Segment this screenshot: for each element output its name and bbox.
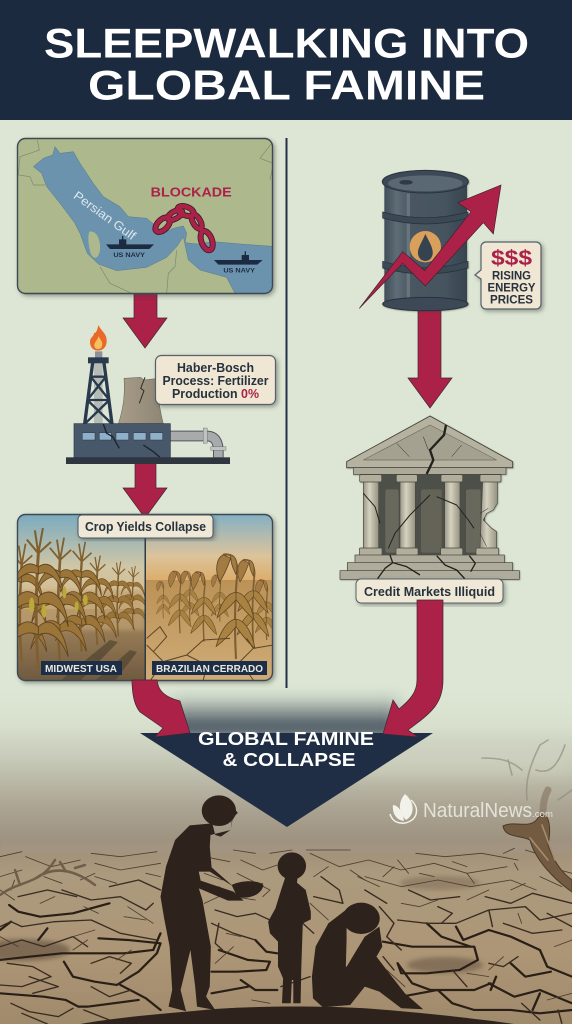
panel: crop yields xyxy=(0,514,278,681)
pediment xyxy=(347,416,513,468)
callout: Haber-Bosch: Production 0% xyxy=(172,387,259,401)
smoke above famine banner xyxy=(172,694,398,736)
pipe xyxy=(170,428,226,457)
man with bowl xyxy=(161,795,263,1011)
arrow: map to factory xyxy=(123,292,167,348)
title xyxy=(44,20,529,108)
ground shadow xyxy=(80,1006,514,1024)
label: Midwest USA: MIDWEST USA xyxy=(45,663,117,675)
fog and horizon backdrop xyxy=(0,690,572,855)
dead branch left xyxy=(0,860,95,895)
icon: leaf logo xyxy=(390,794,417,823)
cracks xyxy=(363,425,488,579)
back wall xyxy=(375,474,485,556)
base plate xyxy=(66,457,230,464)
cooling tower xyxy=(118,377,163,424)
label: Credit Markets Illiquid: Credit Markets Illiquid xyxy=(364,585,495,599)
banner text: global famine and collapse: & COLLAPSE xyxy=(222,749,356,770)
label: Crop Yields Collapse: Crop Yields Collapse xyxy=(85,520,206,534)
ship: left US Navy xyxy=(106,236,154,259)
label: Persian Gulf: Persian Gulf xyxy=(71,188,139,243)
callout: rising energy prices xyxy=(475,242,541,309)
cracked earth ground xyxy=(0,842,572,1024)
gulf water xyxy=(33,147,277,297)
arrow: factory to crops xyxy=(123,460,167,518)
ship: right US Navy xyxy=(214,251,263,275)
panel: Persian Gulf map xyxy=(18,138,277,297)
icon: chain xyxy=(153,204,215,252)
left scene: Midwest xyxy=(18,515,144,680)
watermark: NaturalNews.com: NaturalNews xyxy=(423,800,532,822)
callout: rising energy prices: PRICES xyxy=(490,294,533,306)
callout: Haber-Bosch: Haber-Bosch xyxy=(177,361,254,375)
callout: rising energy prices: RISING xyxy=(492,270,531,282)
right scene: Brazilian Cerrado xyxy=(145,514,278,681)
icon: cracked bank xyxy=(340,416,519,579)
columns xyxy=(359,475,501,555)
ship: left US Navy: US NAVY xyxy=(113,252,146,259)
blockade label: BLOCKADE xyxy=(151,185,232,200)
arrow: crops to famine xyxy=(132,680,190,737)
arrow: rising energy prices xyxy=(359,185,501,308)
banner text: global famine and collapse: GLOBAL FAMINE xyxy=(198,728,374,749)
dead tree right xyxy=(482,740,572,892)
silhouettes: starving family xyxy=(80,795,514,1024)
banner text: global famine and collapse xyxy=(198,728,374,770)
callout: rising energy prices: $$$ xyxy=(491,247,532,270)
watermark: NaturalNews.com xyxy=(390,794,553,823)
title: GLOBAL FAMINE xyxy=(88,62,485,108)
header band xyxy=(0,0,572,120)
watermark: NaturalNews.com: .com xyxy=(532,809,553,820)
callout: Haber-Bosch xyxy=(156,356,276,404)
title: SLEEPWALKING INTO xyxy=(44,20,529,66)
windows xyxy=(82,433,163,440)
child xyxy=(268,852,311,1003)
column divider xyxy=(286,138,288,688)
label: Crop Yields Collapse xyxy=(78,515,213,538)
callout: rising energy prices: ENERGY xyxy=(488,282,536,294)
icon: oil barrel xyxy=(382,170,468,311)
label: Credit Markets Illiquid xyxy=(356,579,503,603)
icon: Haber-Bosch factory xyxy=(66,325,230,464)
flame xyxy=(90,325,107,351)
arrow: energy to credit xyxy=(408,305,452,408)
arrow: credit to famine xyxy=(383,600,443,737)
ship: right US Navy: US NAVY xyxy=(223,268,256,275)
steps xyxy=(340,555,519,579)
label: Brazilian Cerrado: BRAZILIAN CERRADO xyxy=(156,663,263,675)
building xyxy=(74,424,170,458)
seated woman xyxy=(312,903,423,1009)
banner: famine triangle xyxy=(140,733,433,827)
callout: Haber-Bosch: Process: Fertilizer xyxy=(162,374,269,388)
derrick xyxy=(85,351,112,424)
